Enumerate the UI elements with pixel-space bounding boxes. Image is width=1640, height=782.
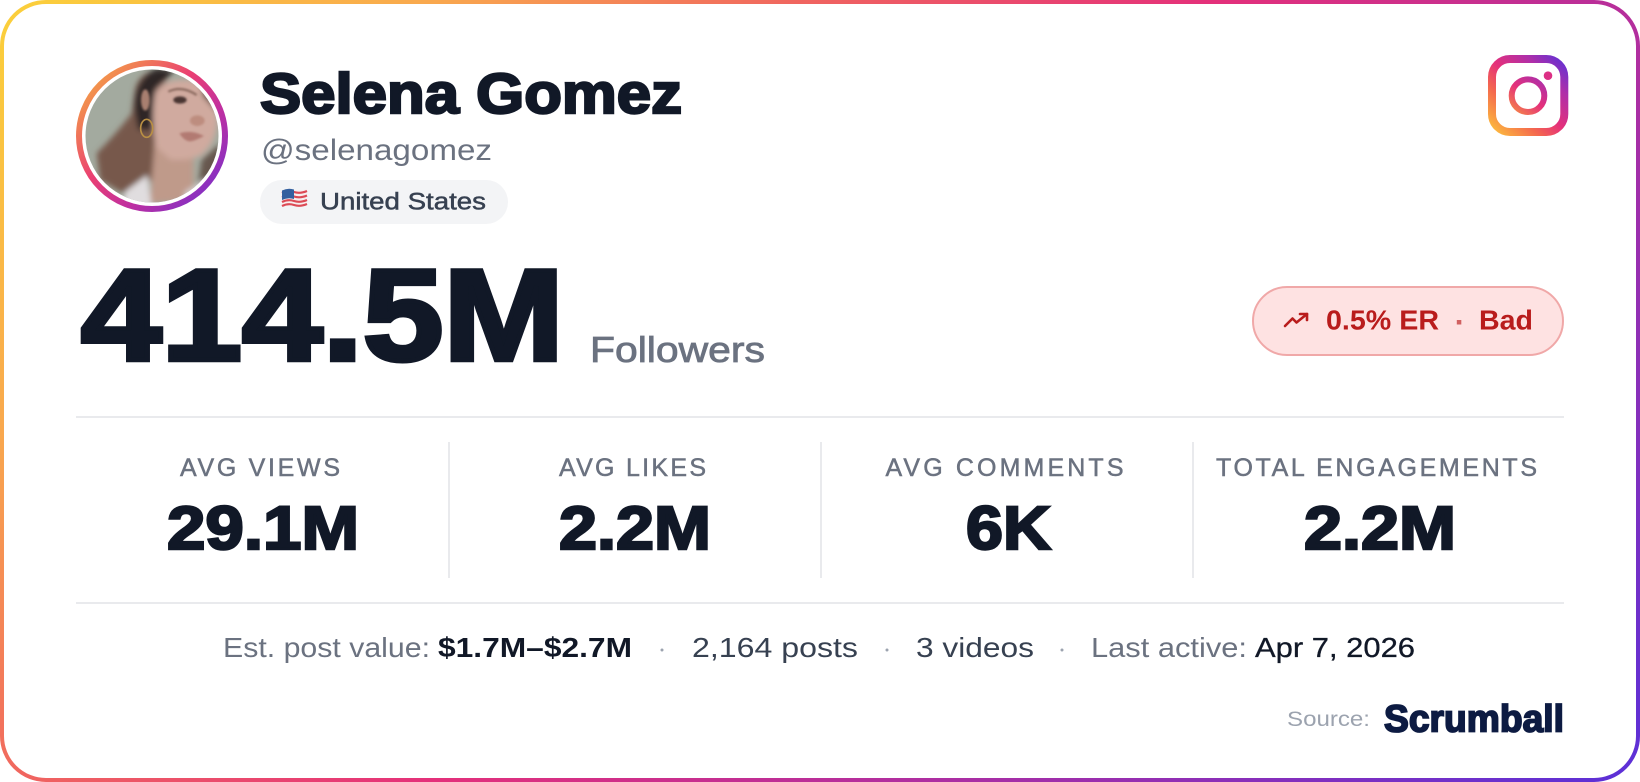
stat: total engagements: 2.2M — [1304, 494, 1456, 562]
stat: total engagements: TOTAL ENGAGEMENTS — [1216, 454, 1537, 482]
icon: Instagram logo — [1492, 59, 1564, 132]
title: name: Selena Gomez — [260, 62, 682, 126]
stat: avg comments: AVG COMMENTS — [886, 454, 1124, 482]
footer meta line — [223, 632, 1415, 663]
handle: @selenagomez — [261, 134, 492, 167]
source attribution — [1287, 698, 1564, 740]
stat: avg comments — [886, 454, 1124, 562]
stat: avg likes: 2.2M — [559, 494, 711, 562]
engagement rate badge — [1253, 287, 1563, 355]
stat: avg views — [167, 454, 359, 562]
badge text: rate: 0.5% ER — [1326, 304, 1439, 336]
source attribution: Source: — [1287, 708, 1370, 731]
footer meta line: $1.7M–$2.7M — [438, 632, 632, 663]
stat: total engagements — [1216, 454, 1537, 562]
stat: avg views: 29.1M — [167, 494, 359, 562]
followers label: Followers — [590, 329, 765, 370]
icon: avatar with gradient ring — [77, 60, 230, 213]
icon: trending arrow — [1285, 314, 1307, 326]
big number: 414.5M — [81, 242, 564, 388]
footer meta line: Last active: — [1091, 632, 1247, 663]
country pill — [260, 180, 508, 224]
footer meta line: Est. post value: — [223, 632, 430, 663]
footer meta line: 3 videos — [916, 632, 1034, 663]
stat: avg likes — [559, 454, 711, 562]
country name: United States — [320, 188, 486, 216]
footer meta line: Apr 7, 2026 — [1255, 632, 1415, 663]
badge text: rating: Bad — [1479, 304, 1533, 336]
Scrumball logo text: Scrumball — [1384, 698, 1564, 740]
icon: hoop earring — [141, 119, 153, 137]
footer meta line: 2,164 posts — [692, 632, 858, 663]
icon: US flag — [282, 189, 307, 207]
stat: avg comments: 6K — [966, 494, 1051, 562]
stat: avg views: AVG VIEWS — [180, 454, 340, 482]
stat: avg likes: AVG LIKES — [559, 454, 706, 482]
badge separator — [1457, 320, 1461, 324]
follower count — [81, 242, 765, 388]
